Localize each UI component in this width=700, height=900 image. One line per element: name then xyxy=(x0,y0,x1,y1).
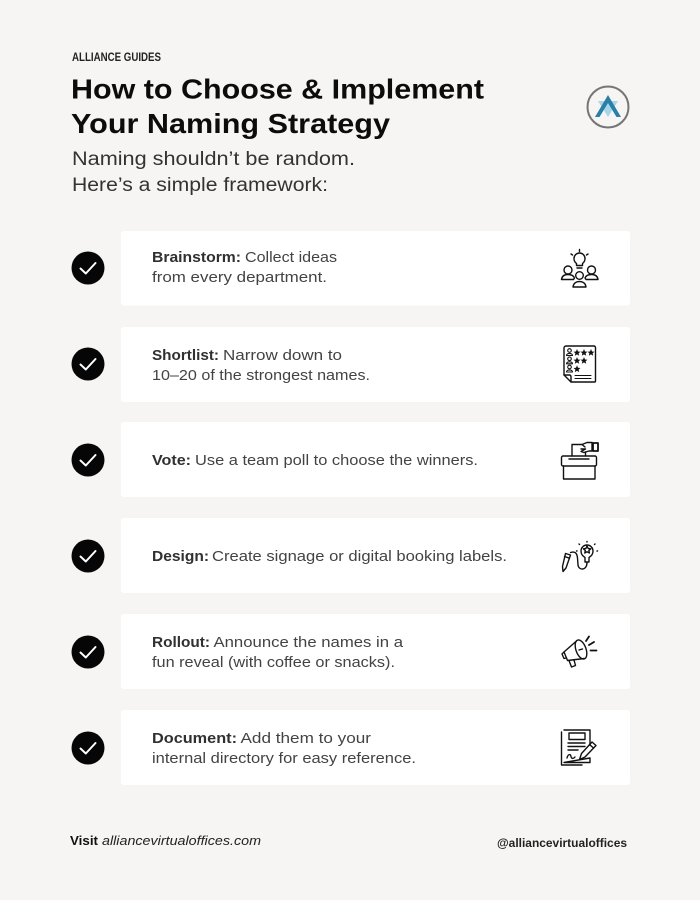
icon: check mark xyxy=(72,252,104,284)
text: Rollout: Announce the names in a xyxy=(214,634,404,651)
text: Rollout xyxy=(152,634,404,671)
icon: check mark xyxy=(72,348,104,380)
text: Document: Document: xyxy=(152,730,237,747)
icon: Alliance logo xyxy=(588,86,628,128)
text: Document: internal directory for easy reference. xyxy=(152,750,416,767)
icon: pencil connected to light bulb xyxy=(562,542,598,572)
title: Your Naming Strategy xyxy=(71,108,390,139)
text: Vote: Vote: xyxy=(152,452,191,469)
text: Rollout: Rollout: xyxy=(152,634,210,651)
step: Document xyxy=(72,710,630,785)
card: Vote xyxy=(121,422,630,497)
icon: megaphone xyxy=(562,636,596,667)
icon: check mark xyxy=(72,444,104,476)
icon: check mark xyxy=(72,732,104,764)
card: Shortlist xyxy=(121,327,630,402)
card: Brainstorm xyxy=(121,231,630,306)
subtitle xyxy=(72,149,355,196)
card: Document xyxy=(121,710,630,785)
text: Document xyxy=(152,730,416,767)
icon: ballot box xyxy=(562,442,598,479)
icon: signed document with pen xyxy=(562,730,596,765)
card: Rollout xyxy=(121,614,630,689)
step: Design xyxy=(72,518,630,593)
text: Shortlist xyxy=(152,347,370,384)
step: Brainstorm xyxy=(72,231,630,306)
text: Design: Design: xyxy=(152,548,209,565)
title xyxy=(71,74,484,139)
text: Document: Add them to your xyxy=(240,730,371,747)
text: Brainstorm xyxy=(152,249,337,286)
subtitle: Naming shouldn’t be random. xyxy=(72,149,355,170)
card: Design xyxy=(121,518,630,593)
icon: check mark xyxy=(72,540,104,572)
text: Brainstorm: Collect ideas xyxy=(245,249,337,266)
text: Vote: Use a team poll to choose the winners. xyxy=(195,452,478,469)
footer: website: alliancevirtualoffices.com xyxy=(102,833,261,848)
text: Shortlist: Narrow down to xyxy=(223,347,342,364)
eyebrow label: ALLIANCE GUIDES xyxy=(72,52,161,64)
step: Shortlist xyxy=(72,327,630,402)
title: How to Choose & Implement xyxy=(71,74,484,104)
text: Shortlist: 10–20 of the strongest names. xyxy=(152,367,370,384)
footer: website: Visit xyxy=(70,833,99,848)
icon: rated list document xyxy=(564,346,596,382)
text: Rollout: fun reveal (with coffee or snacks). xyxy=(152,654,395,671)
text: Design: Create signage or digital booking labels. xyxy=(212,548,507,565)
subtitle: Here’s a simple framework: xyxy=(72,175,328,196)
step: Vote xyxy=(72,422,630,497)
text: Brainstorm: from every department. xyxy=(152,269,327,286)
text: Brainstorm: Brainstorm: xyxy=(152,249,241,266)
step: Rollout xyxy=(72,614,630,689)
icon: team with light bulb xyxy=(562,250,598,287)
text: Shortlist: Shortlist: xyxy=(152,347,219,364)
footer: social handle: @alliancevirtualoffices xyxy=(497,838,627,850)
icon: check mark xyxy=(72,636,104,668)
